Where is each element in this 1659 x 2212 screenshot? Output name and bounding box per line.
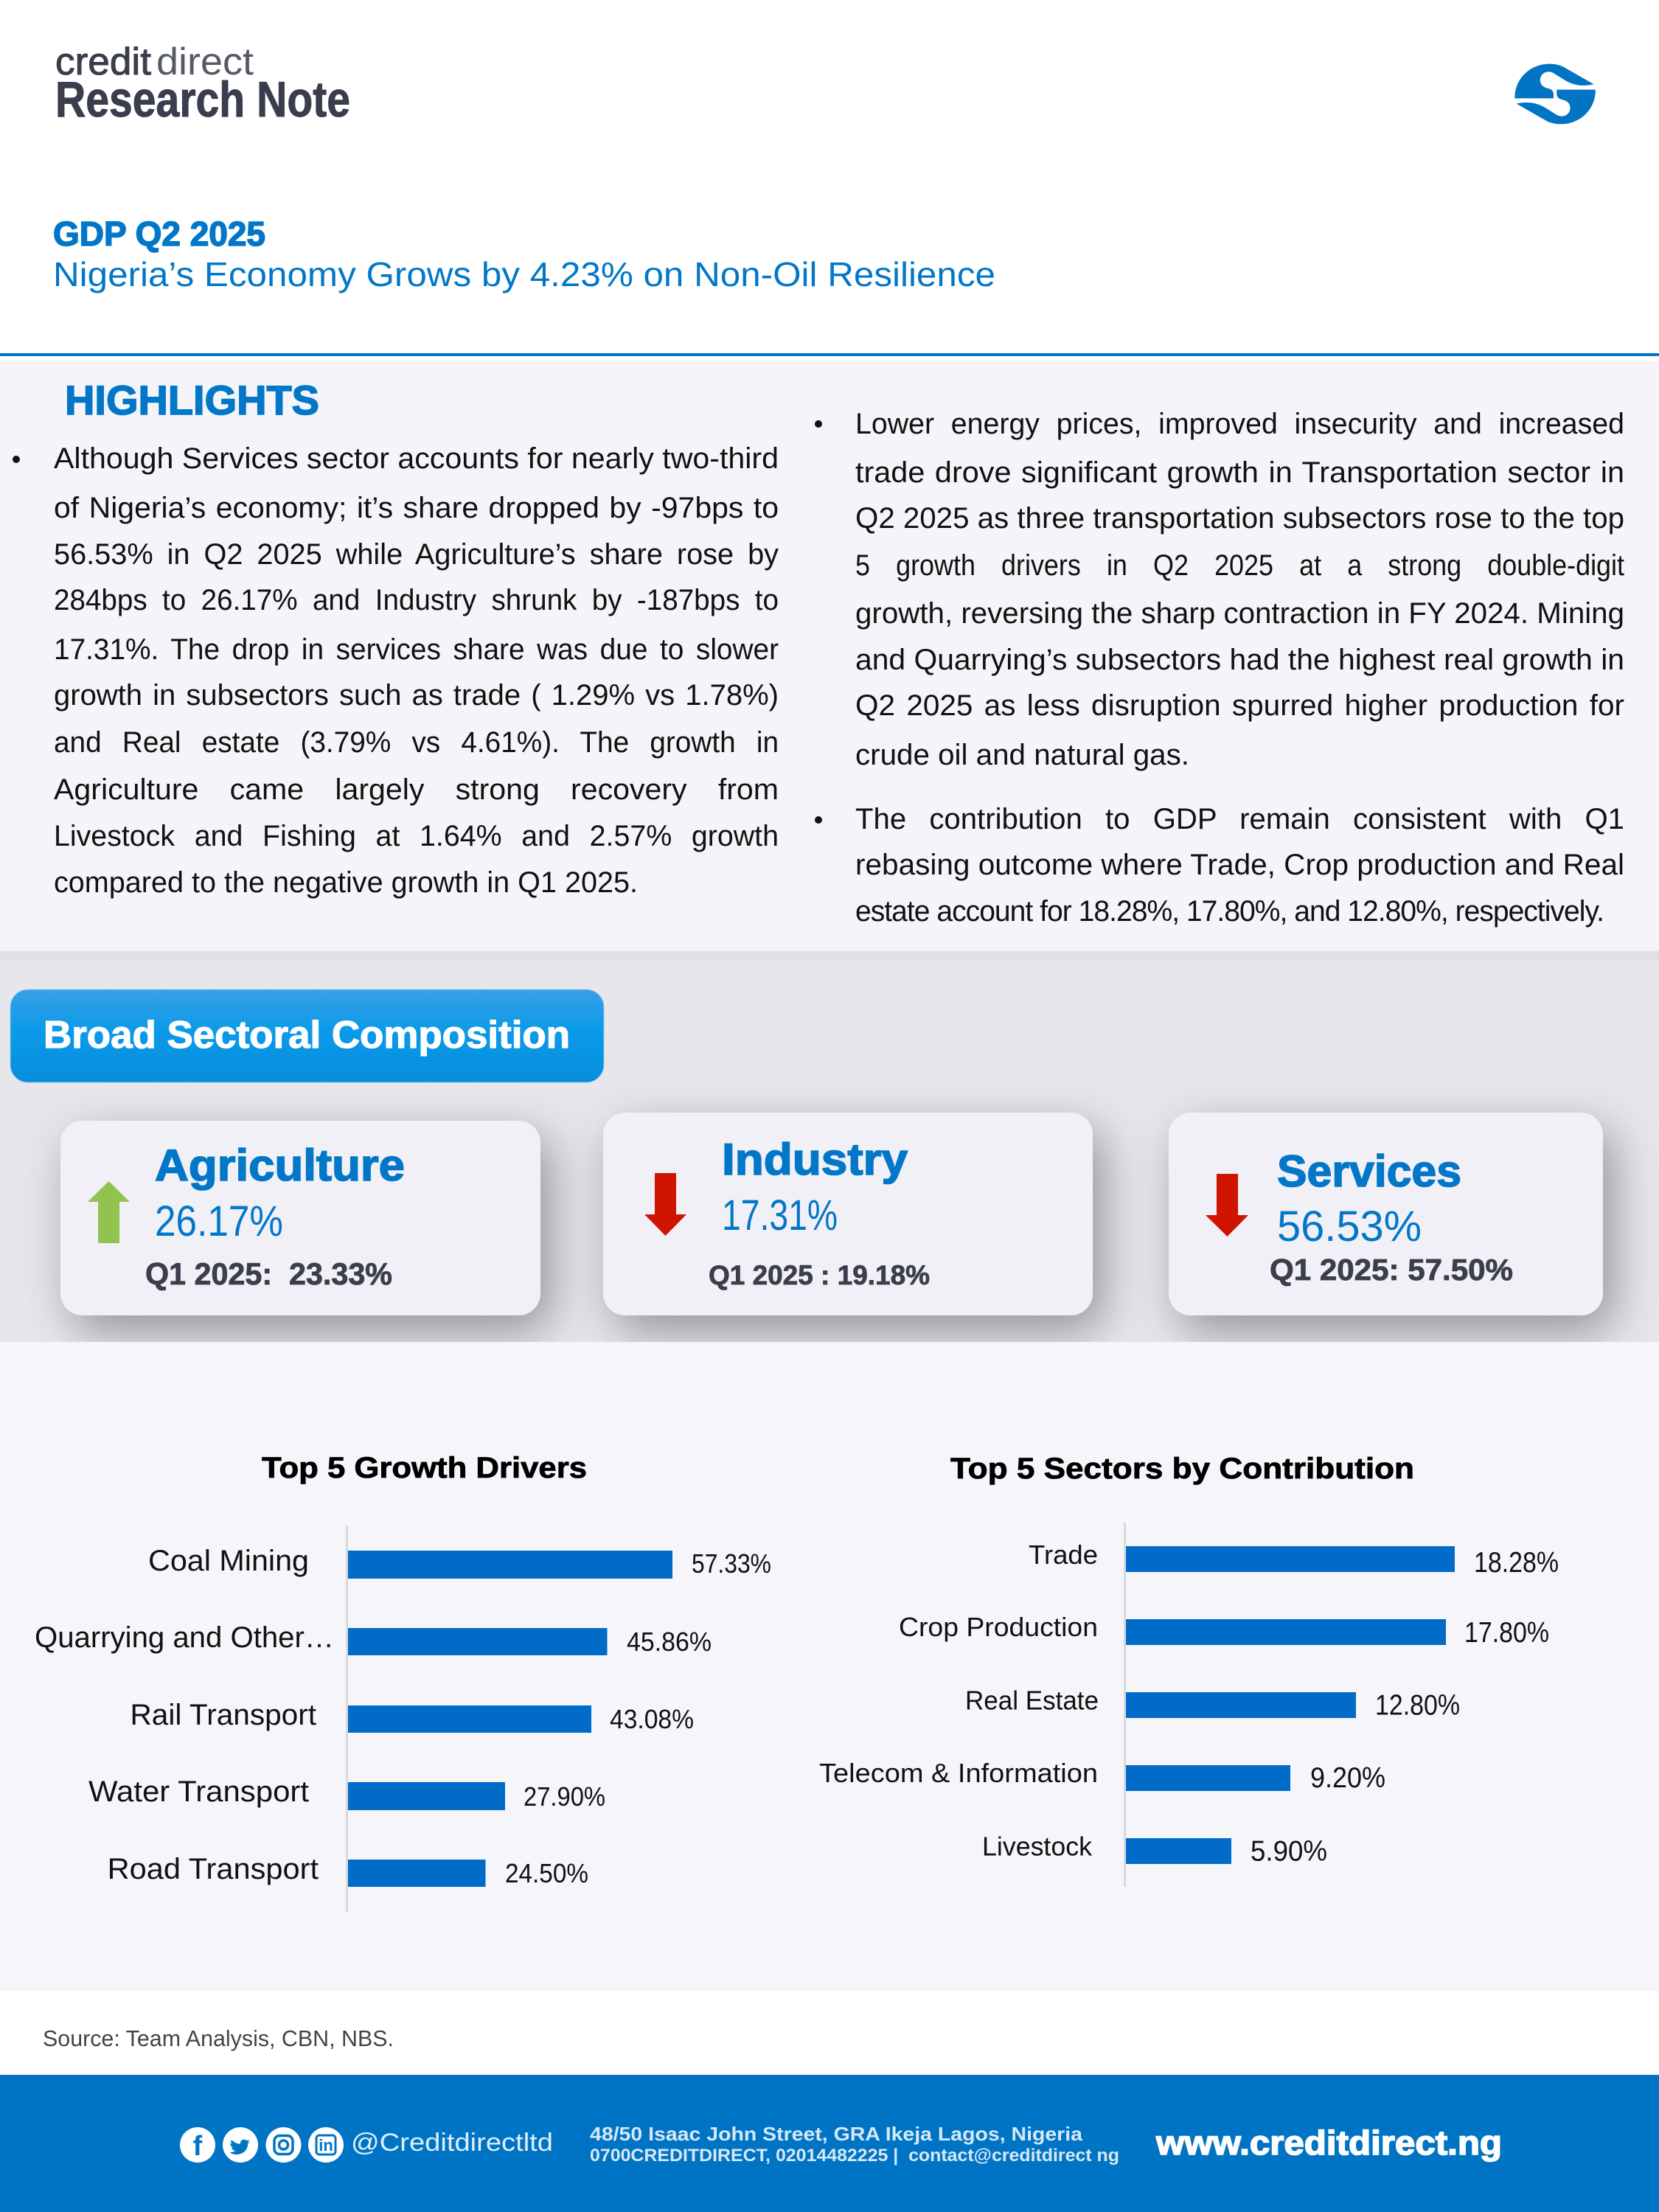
sector name: Industry [722, 1135, 908, 1184]
card: services [1169, 1113, 1603, 1315]
bar: telecom and information: Telecom & Information [819, 1758, 1098, 1788]
bar chart: top 5 growth drivers [35, 1452, 771, 1912]
icon: up arrow [88, 1181, 130, 1243]
text block: right column: crude oil and natural gas. [855, 739, 1189, 771]
contact details [590, 2123, 1119, 2166]
prior quarter: Q1 2025: 57.50% [1270, 1253, 1513, 1287]
bar: road transport [108, 1853, 588, 1888]
bar: crop production: Crop Production [899, 1612, 1098, 1642]
bar: rail transport: Rail Transport [130, 1699, 316, 1731]
icon: linkedin: in [319, 2136, 333, 2154]
text block: right column: trade drove significant growth in Transportation sector in [855, 456, 1624, 489]
prior quarter: Q1 2025: 23.33% [145, 1256, 392, 1291]
text block: right column: rebasing outcome where Trade, Crop production and Real [855, 849, 1624, 881]
bar: livestock: 5.90% [1251, 1836, 1327, 1867]
text block: right column: and Quarrying’s subsectors had the highest real growth in [855, 644, 1624, 676]
card: agriculture [60, 1121, 540, 1315]
sector share: 26.17% [155, 1197, 283, 1245]
icon: down arrow [644, 1173, 686, 1236]
bar: trade [1029, 1540, 1559, 1579]
footer [0, 2075, 1659, 2212]
text block: left column: growth in subsectors such as trade ( 1.29% vs 1.78%) [54, 679, 779, 712]
bar: water transport: Water Transport [88, 1775, 309, 1808]
website: www.creditdirect.ng [1155, 2124, 1502, 2162]
heading button: Broad Sectoral Composition [44, 1014, 570, 1057]
bar: water transport: 27.90% [524, 1781, 605, 1812]
bar: coal mining: Coal Mining [148, 1545, 309, 1577]
panel: highlights [0, 361, 1659, 951]
header: report brand: direct [156, 41, 254, 83]
text block: left column: of Nigeria’s economy; it’s share dropped by -97bps to [54, 492, 779, 524]
text block: right column: Lower energy prices, improved insecurity and increased [855, 408, 1624, 440]
bar: coal mining: 57.33% [692, 1548, 771, 1579]
bar: crop production: 17.80% [1464, 1617, 1549, 1649]
text block: right column: The contribution to GDP remain consistent with Q1 [855, 803, 1624, 835]
text block: left column [13, 442, 779, 899]
text block: right column: Q2 2025 as less disruption spurred higher production for [855, 689, 1624, 722]
text block: left column: 17.31%. The drop in services share was due to slower [54, 633, 779, 666]
subtitle: Nigeria’s Economy Grows by 4.23% on Non-Oil Resilience [53, 255, 995, 293]
chart title: Top 5 Sectors by Contribution [950, 1453, 1414, 1485]
icon: instagram [265, 2127, 301, 2163]
icon: company logo [1514, 64, 1596, 124]
sector name: Services [1277, 1147, 1461, 1196]
header: report brand [55, 41, 350, 128]
contact details: 48/50 Isaac John Street, GRA Ikeja Lagos, Nigeria [590, 2123, 1083, 2145]
sector share: 17.31% [722, 1192, 838, 1239]
text block: right column: Q2 2025 as three transportation subsectors rose to the top [855, 502, 1624, 535]
heading button [10, 990, 604, 1082]
bar: rail transport [130, 1699, 694, 1734]
title [53, 215, 995, 293]
sector name: Agriculture [155, 1141, 405, 1190]
bar: road transport: Road Transport [108, 1853, 319, 1885]
title: GDP Q2 2025 [53, 215, 265, 253]
bar: crop production [899, 1612, 1549, 1649]
bar: water transport [88, 1775, 605, 1812]
bar: trade: 18.28% [1474, 1547, 1559, 1579]
panel: broad sectoral composition [0, 951, 1659, 1342]
prior quarter: Q1 2025 : 19.18% [709, 1260, 930, 1290]
bar: quarrying: 45.86% [627, 1627, 712, 1657]
report type: Research Note [55, 72, 350, 128]
card: industry [603, 1113, 1093, 1315]
text block: left column: Livestock and Fishing at 1.64% and 2.57% growth [54, 820, 779, 852]
bar: rail transport: 43.08% [610, 1704, 694, 1734]
text block: left column: compared to the negative growth in Q1 2025. [54, 866, 638, 899]
text block: right column [815, 408, 1624, 928]
brand name: credit [55, 41, 152, 83]
icon: facebook: f [193, 2131, 203, 2162]
bar: real estate [965, 1686, 1460, 1721]
icon: linkedin [308, 2127, 344, 2163]
icon: down arrow [1206, 1174, 1248, 1237]
icon: facebook [180, 2127, 215, 2163]
bar: quarrying: Quarrying and Other… [35, 1621, 334, 1654]
bar: livestock: Livestock [982, 1832, 1093, 1861]
bar: telecom and information [819, 1758, 1385, 1794]
bar: road transport: 24.50% [505, 1858, 588, 1888]
bar: quarrying [35, 1621, 712, 1657]
text block: left column: Agriculture came largely strong recovery from [54, 773, 779, 806]
bar: coal mining [148, 1545, 771, 1579]
social handle: @Creditdirectltd [351, 2129, 553, 2157]
sector share: 56.53% [1277, 1203, 1422, 1251]
text block: left column: Although Services sector accounts for nearly two-third [54, 442, 779, 475]
text block: left column: and Real estate (3.79% vs 4.61%). The growth in [54, 726, 779, 759]
text block: left column: 284bps to 26.17% and Industry shrunk by -187bps to [54, 584, 779, 616]
text block: right column: growth, reversing the sharp contraction in FY 2024. Mining [855, 597, 1624, 630]
bar: real estate: Real Estate [965, 1686, 1099, 1715]
chart title: Top 5 Growth Drivers [262, 1452, 587, 1484]
text block: right column: estate account for 18.28%, 17.80%, and 12.80%, respectively. [855, 895, 1604, 928]
bar chart: top 5 sectors by contribution [819, 1453, 1559, 1887]
panel: charts [0, 1342, 1659, 1991]
bar: trade: Trade [1029, 1540, 1098, 1570]
contact details: 0700CREDITDIRECT, 02014482225 | contact@creditdirect ng [590, 2146, 1119, 2166]
icon: twitter [223, 2127, 258, 2163]
heading: highlights: HIGHLIGHTS [65, 377, 319, 423]
text block: left column: 56.53% in Q2 2025 while Agriculture’s share rose by [54, 538, 779, 571]
source note: Source: Team Analysis, CBN, NBS. [43, 2025, 394, 2051]
bar: telecom and information: 9.20% [1310, 1762, 1385, 1794]
bar: real estate: 12.80% [1375, 1690, 1460, 1721]
bar: livestock [982, 1832, 1327, 1867]
